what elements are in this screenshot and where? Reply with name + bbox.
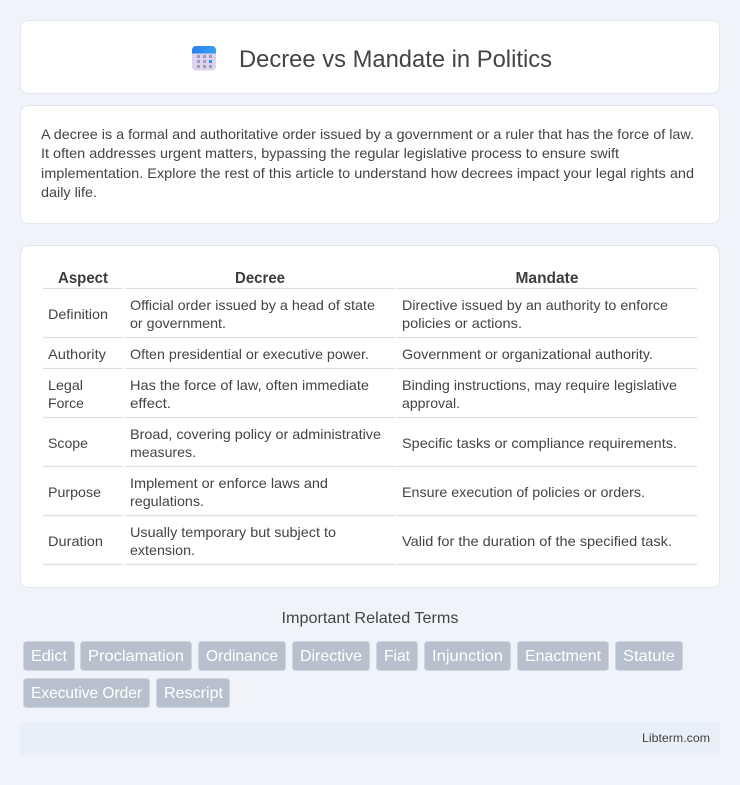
- footer credit: Libterm.com: [642, 731, 710, 745]
- tag: Rescript: [156, 678, 230, 708]
- row: definition: policies or actions.: [402, 315, 522, 331]
- tag: Ordinance: [198, 642, 286, 670]
- row: duration: Duration: [48, 533, 103, 549]
- row: authority: Often presidential or executive power.: [130, 346, 369, 362]
- table header: [58, 270, 579, 287]
- tag: Proclamation: [80, 642, 192, 670]
- row: purpose: regulations.: [130, 493, 204, 509]
- tag: Directive: [292, 642, 370, 670]
- row: authority: Government or organizational authority.: [402, 346, 653, 362]
- heading: related terms: Important Related Terms: [282, 610, 458, 627]
- tag: Executive Order: Executive Order: [31, 685, 143, 702]
- row: purpose: Ensure execution of policies or orders.: [402, 484, 645, 500]
- row: legal force: approval.: [402, 395, 460, 411]
- icon: calendar: [192, 46, 216, 70]
- row: legal force: [48, 377, 677, 411]
- row: definition: Official order issued by a head of state: [130, 297, 375, 313]
- row: legal force: Binding instructions, may require legislative: [402, 377, 677, 393]
- row: duration: Valid for the duration of the specified task.: [402, 533, 672, 549]
- tag: Injunction: Injunction: [432, 648, 503, 665]
- tag: Injunction: [424, 642, 510, 670]
- tag: Statute: Statute: [623, 648, 675, 665]
- row: purpose: Implement or enforce laws and: [130, 475, 328, 491]
- row: purpose: Purpose: [48, 484, 101, 500]
- row: authority: Authority: [48, 346, 106, 362]
- tag: Edict: [24, 642, 74, 670]
- row: duration: Usually temporary but subject to: [130, 524, 336, 540]
- row: duration: [48, 524, 672, 558]
- table header: Decree: [235, 270, 285, 287]
- tag: Proclamation: Proclamation: [88, 648, 184, 665]
- row: definition: [48, 297, 668, 331]
- tag: Fiat: Fiat: [384, 648, 411, 665]
- panel: header: [20, 20, 720, 94]
- tag: Rescript: Rescript: [164, 685, 224, 702]
- related term tags: [24, 642, 682, 708]
- row: legal force: Force: [48, 395, 84, 411]
- row: scope: measures.: [130, 444, 196, 460]
- table header: Aspect: [58, 270, 109, 287]
- tag: Ordinance: Ordinance: [206, 648, 278, 665]
- tag: Fiat: [376, 642, 418, 670]
- row: scope: Specific tasks or compliance requirements.: [402, 435, 677, 451]
- row: legal force: effect.: [130, 395, 171, 411]
- row: definition: Directive issued by an authority to enforce: [402, 297, 668, 313]
- row: definition: or government.: [130, 315, 226, 331]
- tag: Enactment: Enactment: [525, 648, 602, 665]
- tag: Enactment: [518, 642, 608, 670]
- row: scope: Scope: [48, 435, 88, 451]
- row: definition: Definition: [48, 306, 108, 322]
- row: purpose: [48, 475, 645, 509]
- tag: Directive: Directive: [300, 648, 362, 665]
- row: scope: Broad, covering policy or administrative: [130, 426, 381, 442]
- footer: [20, 722, 720, 755]
- tag: Statute: [616, 642, 682, 670]
- table rules: [43, 288, 697, 564]
- row: legal force: Legal: [48, 377, 83, 393]
- text block: introduction: daily life.: [41, 184, 97, 200]
- text block: introduction: It often addresses urgent matters, bypassing the regular legislative process to ensure swift: [41, 145, 619, 161]
- tag: Executive Order: [24, 678, 150, 708]
- title: Decree vs Mandate in Politics: [239, 46, 552, 73]
- row: authority: [48, 346, 653, 362]
- table header: Mandate: [516, 270, 579, 287]
- row: scope: [48, 426, 677, 460]
- text block: introduction: [41, 126, 694, 200]
- panel: introduction: [20, 106, 720, 224]
- text block: introduction: implementation. Explore the rest of this article to understand how decrees impact your legal rights and: [41, 165, 694, 181]
- row: duration: extension.: [130, 542, 195, 558]
- panel: comparison table: [20, 246, 720, 588]
- text block: introduction: A decree is a formal and authoritative order issued by a government or a ruler that has the force of law.: [41, 126, 694, 142]
- tag: Edict: Edict: [31, 648, 68, 665]
- row: legal force: Has the force of law, often immediate: [130, 377, 369, 393]
